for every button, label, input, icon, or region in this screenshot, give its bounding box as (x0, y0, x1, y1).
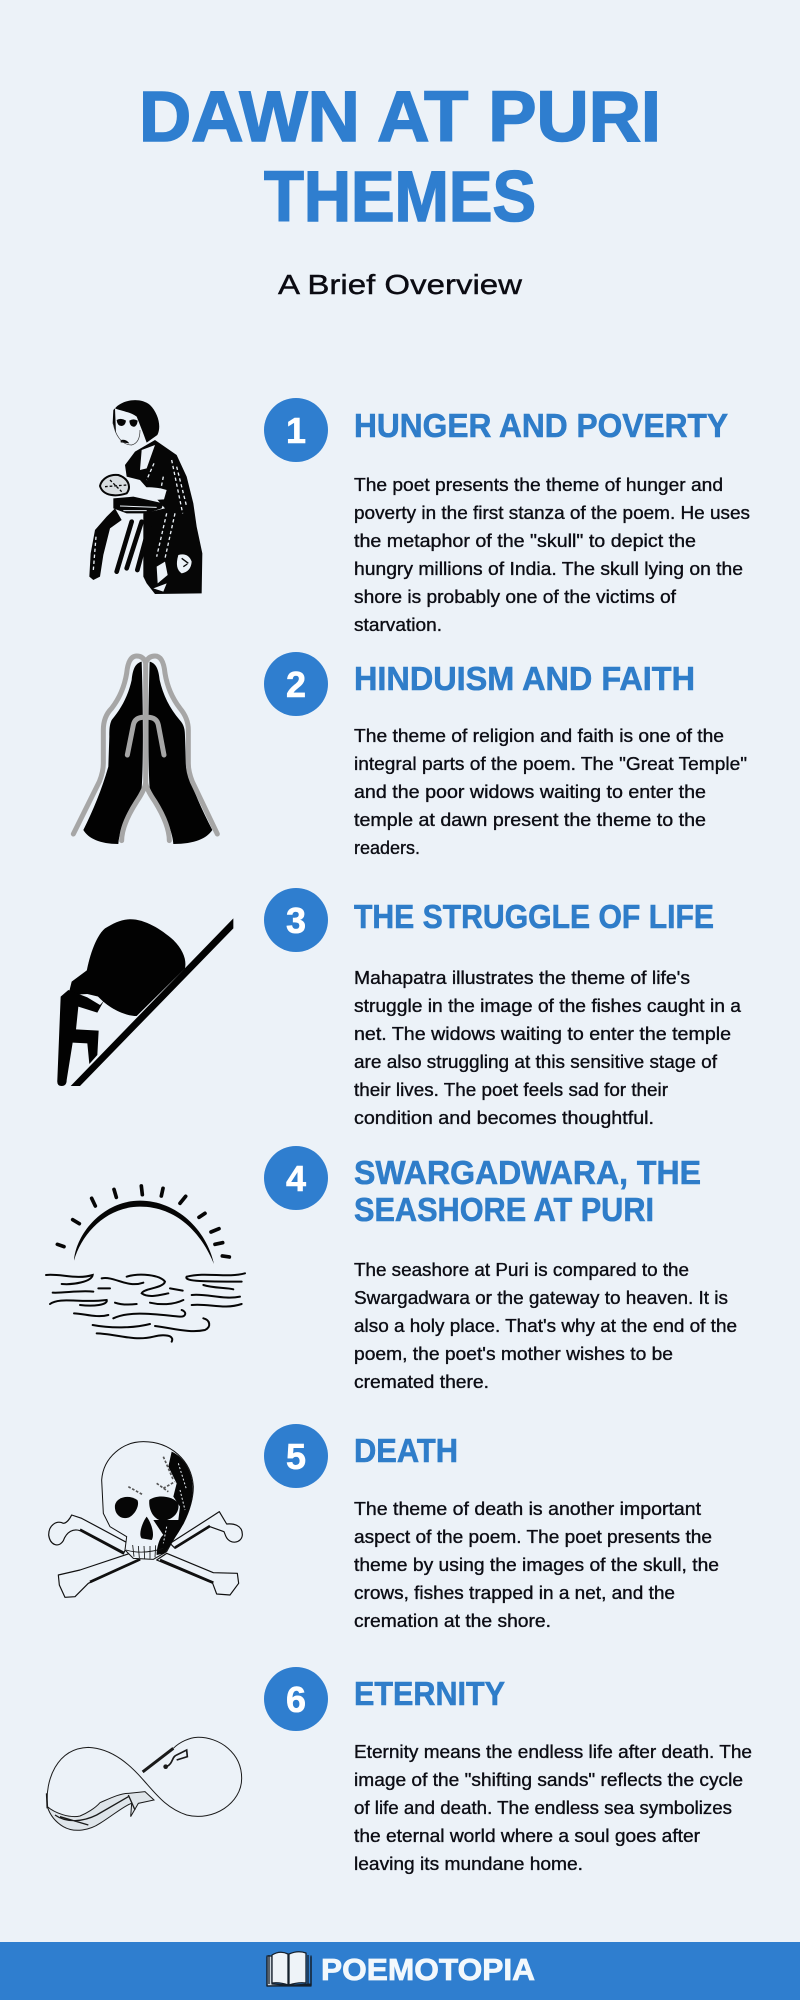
body text 2: and the poor widows waiting to enter the (354, 782, 706, 802)
title (139, 78, 661, 237)
body text 6: the eternal world where a soul goes after (354, 1826, 700, 1846)
body text 4 (354, 1260, 737, 1392)
number badge 4 (264, 1146, 328, 1210)
number badge 1 (264, 398, 328, 462)
icon: man pushing a boulder uphill (57, 918, 233, 1086)
section 3: the struggle of life (264, 888, 742, 1128)
body text 5: The theme of death is another important (354, 1499, 701, 1519)
section 2: hinduism and faith (264, 652, 747, 858)
body text 5: theme by using the images of the skull, the (354, 1555, 719, 1575)
heading 3: THE STRUGGLE OF LIFE (354, 898, 714, 935)
body text 4: The seashore at Puri is compared to the (354, 1260, 689, 1280)
body text 5: cremation at the shore. (354, 1611, 551, 1631)
icon: sun setting over waves (46, 1186, 245, 1342)
body text 1: hungry millions of India. The skull lying on the (354, 559, 743, 579)
number badge 2 (264, 652, 328, 716)
number badge 4: 4 (286, 1158, 306, 1199)
body text 6: of life and death. The endless sea symbolizes (354, 1798, 732, 1818)
footer brand name: POEMOTOPIA (321, 1952, 535, 1987)
icon: open book (267, 1952, 311, 1986)
number badge 2: 2 (286, 664, 306, 705)
body text 6: image of the "shifting sands" reflects the cycle (354, 1770, 743, 1790)
section 5: death (264, 1424, 719, 1631)
body text 3: net. The widows waiting to enter the temple (354, 1024, 731, 1044)
icon: praying hands (73, 656, 217, 844)
body text 4: also a holy place. That's why at the end of the (354, 1316, 737, 1336)
title: THEMES (264, 158, 536, 237)
body text 1 (354, 475, 750, 635)
number badge 6 (264, 1667, 328, 1731)
number badge 3: 3 (286, 900, 306, 941)
body text 2: integral parts of the poem. The "Great Temple" (354, 754, 747, 774)
icon: skull and crossbones (49, 1442, 242, 1597)
number badge 5 (264, 1424, 328, 1488)
body text 5: crows, fishes trapped in a net, and the (354, 1583, 675, 1603)
body text 1: poverty in the first stanza of the poem. He uses (354, 503, 750, 523)
heading 2: HINDUISM AND FAITH (354, 660, 695, 697)
body text 4: poem, the poet's mother wishes to be (354, 1344, 673, 1364)
body text 1: shore is probably one of the victims of (354, 587, 677, 607)
body text 2: readers. (354, 838, 420, 858)
number badge 1: 1 (286, 410, 306, 451)
heading 6: ETERNITY (354, 1675, 505, 1712)
title: DAWN AT PURI (139, 78, 661, 157)
section 6: eternity (264, 1667, 752, 1874)
number badge 5: 5 (286, 1436, 306, 1477)
section 1: hunger and poverty (264, 398, 750, 635)
body text 6: leaving its mundane home. (354, 1854, 583, 1874)
number badge 6: 6 (286, 1679, 306, 1720)
body text 2: temple at dawn present the theme to the (354, 810, 706, 830)
heading 4: SWARGADWARA, THE (354, 1154, 701, 1191)
body text 3 (354, 968, 742, 1128)
body text 6 (354, 1742, 752, 1874)
body text 1: The poet presents the theme of hunger and (354, 475, 723, 495)
body text 3: their lives. The poet feels sad for their (354, 1080, 668, 1100)
heading 1: HUNGER AND POVERTY (354, 407, 728, 444)
body text 5 (354, 1499, 719, 1631)
body text 2 (354, 726, 747, 858)
number badge 3 (264, 888, 328, 952)
body text 1: starvation. (354, 615, 442, 635)
heading 4 (354, 1154, 701, 1228)
body text 4: cremated there. (354, 1372, 489, 1392)
body text 3: are also struggling at this sensitive stage of (354, 1052, 718, 1072)
body text 2: The theme of religion and faith is one of the (354, 726, 724, 746)
body text 3: struggle in the image of the fishes caught in a (354, 996, 742, 1016)
icon: infinity symbol of a fish and hook (47, 1737, 242, 1830)
heading 4: SEASHORE AT PURI (354, 1191, 654, 1228)
subtitle: A Brief Overview (278, 269, 523, 300)
body text 3: Mahapatra illustrates the theme of life's (354, 968, 690, 988)
icon: mother holding starving child (89, 400, 202, 594)
heading 5: DEATH (354, 1432, 458, 1469)
body text 5: aspect of the poem. The poet presents the (354, 1527, 712, 1547)
body text 1: the metaphor of the "skull" to depict the (354, 531, 696, 551)
body text 6: Eternity means the endless life after death. The (354, 1742, 752, 1762)
body text 4: Swargadwara or the gateway to heaven. It is (354, 1288, 728, 1308)
footer band (0, 1942, 800, 2000)
section 4: swargadwara (264, 1146, 737, 1392)
body text 3: condition and becomes thoughtful. (354, 1108, 654, 1128)
